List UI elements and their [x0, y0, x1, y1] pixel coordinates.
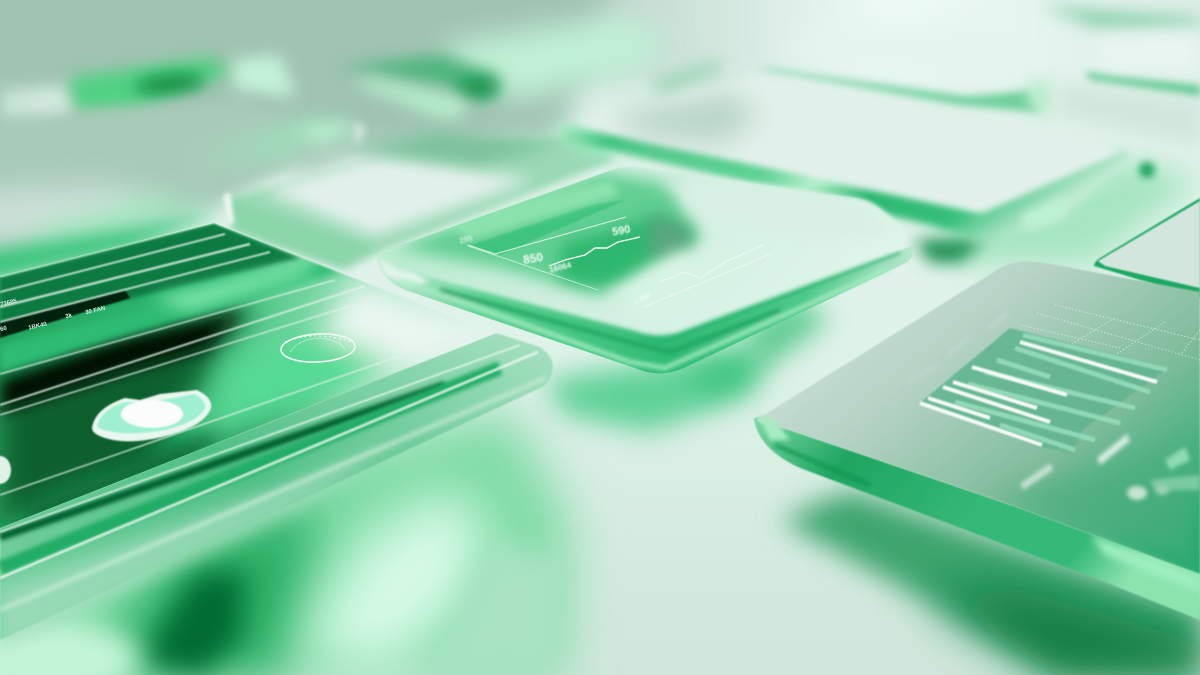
rim fade: [0, 440, 400, 650]
slab top face: [0, 223, 496, 528]
icon: edge button: [0, 456, 11, 484]
chart grid: [1020, 305, 1200, 360]
card edge: [377, 246, 913, 373]
smudge reflection: [610, 92, 760, 145]
rim dark and light bands: [400, 252, 900, 368]
slab edge: [558, 125, 1130, 242]
shadow: floor glow under left panel: [0, 410, 570, 675]
shadow: under center panel: [545, 345, 770, 432]
card label: chart caption: 1 460: [633, 292, 652, 306]
card label: 850: 850: [522, 250, 544, 267]
edge highlights: [1020, 195, 1068, 230]
tiny data labels: 30 FAN: [85, 306, 106, 316]
icon: dial ring: [280, 332, 356, 364]
slab top face: [756, 261, 1200, 574]
icon: glowing button: [92, 390, 211, 441]
card label: 590: 590: [611, 223, 631, 238]
panel: top right glass slab: [558, 77, 1130, 242]
top stripes: [0, 223, 300, 330]
panel: right chart slab: [754, 261, 1200, 620]
rim bands: [0, 345, 546, 610]
slab rim: [0, 333, 553, 640]
rim left highlight: [380, 258, 430, 286]
panel: left data slab: [0, 210, 553, 650]
tiny data labels: 73685: [0, 298, 18, 308]
bar chart: [920, 328, 1168, 453]
tiny data labels: [0, 298, 106, 333]
shadow: under right panel: [745, 160, 1200, 675]
panel: center glass card: [377, 167, 913, 373]
top edge highlight: [0, 223, 496, 333]
panel: upper left glass slab: [0, 100, 372, 285]
face contents: [1000, 304, 1200, 570]
panel: blurred back row: [0, 5, 1200, 145]
tiny data labels: 3k: [65, 313, 73, 320]
panel: far right small slab: [1094, 198, 1200, 298]
card label: 16064: 16064: [548, 260, 573, 275]
card mini chart: [468, 217, 773, 307]
background top wash: [0, 0, 1200, 170]
slab edge: [754, 417, 1200, 620]
rim highlight: [1090, 535, 1200, 592]
card labels: [458, 223, 652, 306]
axis labels: [907, 312, 1009, 383]
chart labels: [1020, 434, 1200, 500]
card label: 285: 285: [458, 233, 474, 246]
panel: middle glass slab: [223, 125, 620, 270]
chart area reflections: [395, 172, 895, 320]
card top face: [382, 167, 906, 335]
tiny data labels: 1BK40: [28, 321, 48, 332]
slab top face: [572, 77, 1122, 213]
